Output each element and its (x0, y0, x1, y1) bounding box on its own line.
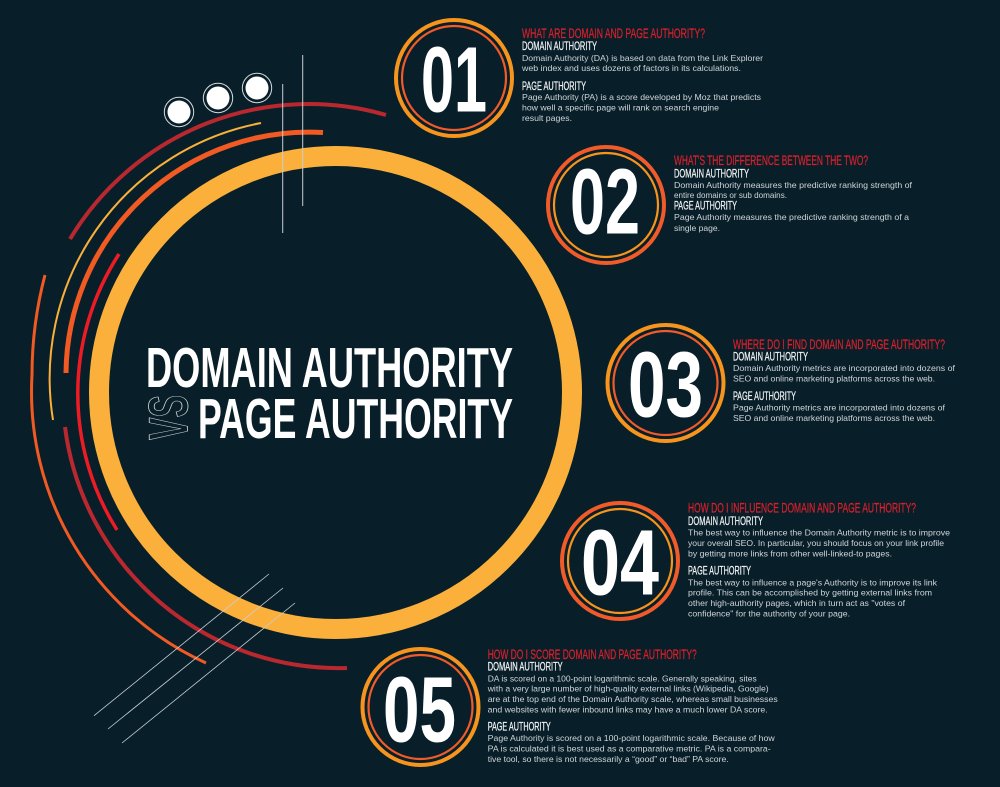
main circle ring (99, 156, 572, 629)
section 03 text: PAGE AUTHORITY (733, 389, 796, 403)
section 01 text (521, 26, 763, 123)
section 04 text: by getting more links from other well-linked-to pages. (688, 548, 892, 558)
section 02 badge: 02 (570, 150, 640, 254)
section 03 badge: 03 (628, 332, 703, 436)
section 03 badge (608, 325, 724, 441)
arc: bright red (78, 254, 119, 530)
section 04 text: profile. This can be accomplished by getting external links from (688, 588, 932, 598)
section 01 text: web index and uses dozens of factors in its calculations. (521, 63, 741, 73)
section 04 text: other high-authority pages, which in turn act as "votes of (688, 598, 906, 608)
section 05 text: Page Authority is scored on a 100-point logarithmic scale. Because of how (488, 733, 775, 743)
three white dots (164, 73, 272, 127)
section 01 text: PAGE AUTHORITY (522, 79, 586, 93)
section 02 text: PAGE AUTHORITY (674, 198, 737, 212)
decorative arcs (32, 104, 386, 668)
section 05 text: are at the top end of the Domain Authority scale, whereas small businesses (488, 694, 778, 704)
section 03 text (733, 337, 956, 423)
section 05 text: PAGE AUTHORITY (488, 720, 551, 734)
section 04 text: PAGE AUTHORITY (688, 563, 751, 577)
section 03 text: DOMAIN AUTHORITY (733, 350, 808, 364)
section 01 text: DOMAIN AUTHORITY (522, 39, 597, 53)
section 01 text: result pages. (522, 113, 572, 123)
section 01 text: Domain Authority (DA) is based on data from the Link Explorer (522, 53, 763, 63)
section 02 text: entire domains or sub domains. (674, 190, 787, 200)
section 05 text: DA is scored on a 100-point logarithmic scale. Generally speaking, sites (488, 673, 757, 683)
section 02 badge (548, 147, 664, 263)
section 03 text: SEO and online marketing platforms across the web. (733, 413, 935, 423)
section 05 badge: 05 (383, 658, 456, 762)
section 04 text: The best way to influence the Domain Authority metric is to improve (688, 528, 950, 538)
section 01 text: Page Authority (PA) is a score developed by Moz that predicts (522, 92, 762, 102)
section 05 badge (362, 649, 478, 765)
arc: thin orange outer (32, 275, 206, 663)
section 01 text: WHAT ARE DOMAIN AND PAGE AUTHORITY? (522, 26, 705, 41)
section 04 badge: 04 (581, 510, 659, 614)
section 02 text: WHAT'S THE DIFFERENCE BETWEEN THE TWO? (674, 153, 868, 168)
section 01 text: how well a specific page will rank on search engine (522, 102, 719, 112)
arc: thin yellow (50, 123, 261, 420)
section 05 text: DOMAIN AUTHORITY (488, 660, 563, 674)
VS outlined label: VS (136, 395, 200, 440)
section 05 text: tive tool, so there is not necessarily a “good” or “bad” PA score. (488, 754, 729, 764)
section 04 text: confidence" for the authority of your page. (688, 608, 850, 618)
section 05 text: PA is calculated it is best used as a comparative metric. PA is a compara- (488, 744, 771, 754)
section 03 text: SEO and online marketing platforms across the web. (733, 373, 935, 383)
section 04 text: your overall SEO. In particular, you should focus on your link profile (688, 538, 944, 548)
section 04 text (688, 501, 950, 618)
section 03 text: Domain Authority metrics are incorporated into dozens of (733, 363, 956, 373)
section 02 text: Domain Authority measures the predictive ranking strength of (674, 180, 913, 190)
section 05 text: and websites with fewer inbound links may have a much lower DA score. (488, 704, 768, 714)
arc: thick orange (66, 132, 323, 373)
section 04 text: DOMAIN AUTHORITY (688, 514, 763, 528)
main title: PAGE AUTHORITY (198, 387, 513, 450)
section 01 badge: 01 (421, 28, 487, 132)
vertical accent lines (283, 55, 303, 233)
section 05 text: HOW DO I SCORE DOMAIN AND PAGE AUTHORITY? (488, 647, 697, 662)
section 05 text (487, 647, 778, 764)
main title (136, 336, 513, 450)
section 02 text: DOMAIN AUTHORITY (674, 166, 749, 180)
section 02 text (674, 153, 913, 233)
section 03 text: Page Authority metrics are incorporated into dozens of (733, 403, 946, 413)
arc: dark red lower (65, 427, 347, 668)
diagonal accent lines (94, 574, 295, 743)
arc: dark red top (70, 104, 386, 239)
section 01 badge (396, 20, 512, 136)
section 05 text: with a very large number of high-quality external links (Wikipedia, Google) (487, 684, 769, 694)
section 02 text: single page. (674, 223, 720, 233)
main title: DOMAIN AUTHORITY (146, 336, 513, 399)
section 04 text: The best way to influence a page's Authority is to improve its link (688, 577, 938, 587)
section 02 text: Page Authority measures the predictive ranking strength of a (674, 212, 909, 222)
